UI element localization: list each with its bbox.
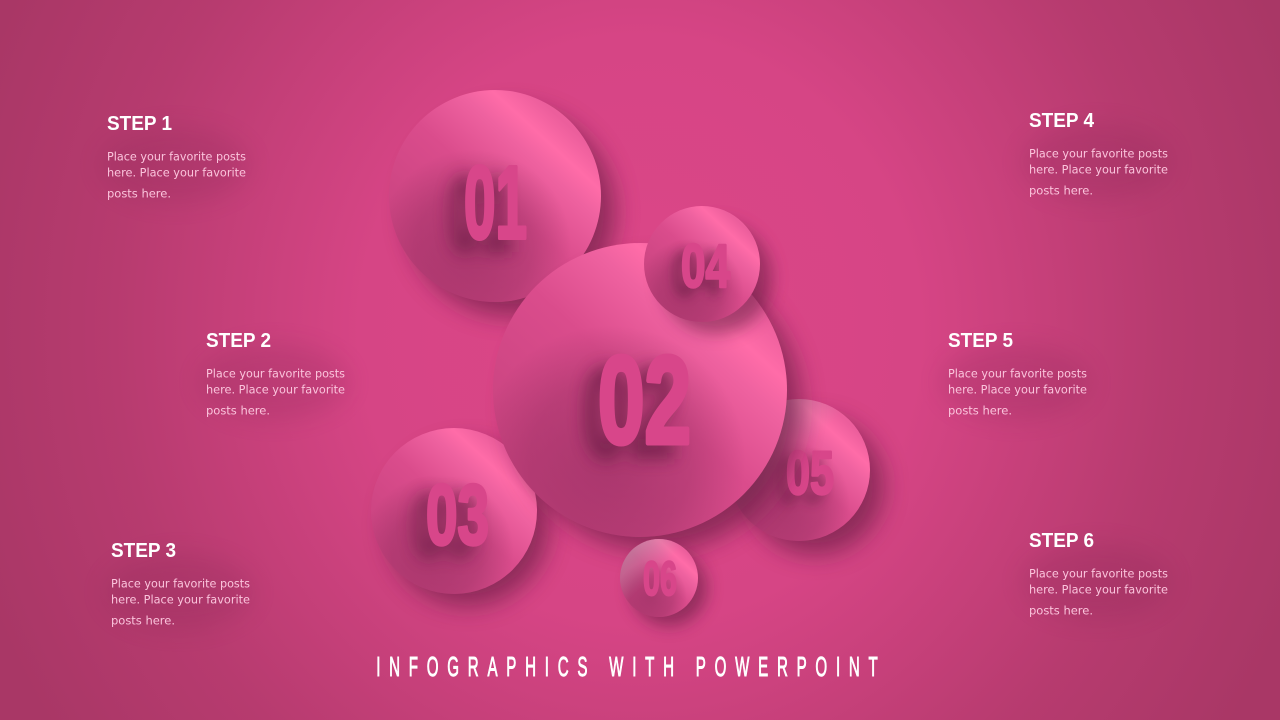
number 01: 01 [464,145,527,260]
number 01 [449,145,527,272]
step 6 [1022,530,1172,620]
step 2 heading: STEP 2 [206,330,271,352]
circle 03 [371,428,549,606]
step 5 text: here. Place your favorite [948,382,1087,396]
number 01: 01 [449,157,512,272]
step 2 text: Place your favorite posts [206,366,345,380]
step 4 text: here. Place your favorite [1029,162,1168,176]
step 5 text [948,366,1087,418]
step 3 [104,540,254,630]
number 03: 03 [413,479,476,574]
number 03: 03 [426,468,489,563]
step 1 text: Place your favorite posts [107,150,246,164]
step 6 text: Place your favorite posts [1029,566,1168,580]
step 6 text: posts here. [1029,604,1093,618]
step 4 [1022,110,1172,200]
step 4 text: posts here. [1029,184,1093,198]
step 2 text: here. Place your favorite [206,382,345,396]
step 2 text: posts here. [206,404,270,418]
step 2 text [206,366,345,418]
step 6 heading: STEP 6 [1029,530,1094,552]
step 5 [941,330,1091,420]
step 1 text [107,150,246,200]
step 3 heading: STEP 3 [111,540,176,562]
circle 01 [389,90,615,316]
number 04: 04 [672,240,721,308]
step 5 text: posts here. [948,404,1012,418]
step 4 text [1029,146,1168,198]
step 1 text: here. Place your favorite [107,166,246,180]
number 02: 02 [583,345,676,483]
step 6 text [1029,566,1168,618]
step 2 [199,330,349,420]
step 4 text: Place your favorite posts [1029,146,1168,160]
number 05: 05 [777,447,825,515]
step 1 heading: STEP 1 [107,113,172,135]
circle 02 [493,243,801,551]
number 04: 04 [681,232,730,300]
number 05: 05 [786,439,834,507]
title: INFOGRAPHICS WITH POWERPOINT [376,651,878,682]
step 1 text: posts here. [107,186,171,200]
step 5 text: Place your favorite posts [948,366,1087,380]
number 02: 02 [598,332,691,470]
step 1 [100,113,250,203]
step 5 heading: STEP 5 [948,330,1013,352]
step 3 text: posts here. [111,614,175,628]
step 3 text: Place your favorite posts [111,576,250,590]
step 3 text [111,576,250,628]
number 06: 06 [643,553,677,606]
step 4 heading: STEP 4 [1029,110,1095,132]
step 6 text: here. Place your favorite [1029,582,1168,596]
circle 06 [620,539,707,626]
circle 04 [644,206,772,334]
circle 05 [728,399,884,555]
step 3 text: here. Place your favorite [111,592,250,606]
